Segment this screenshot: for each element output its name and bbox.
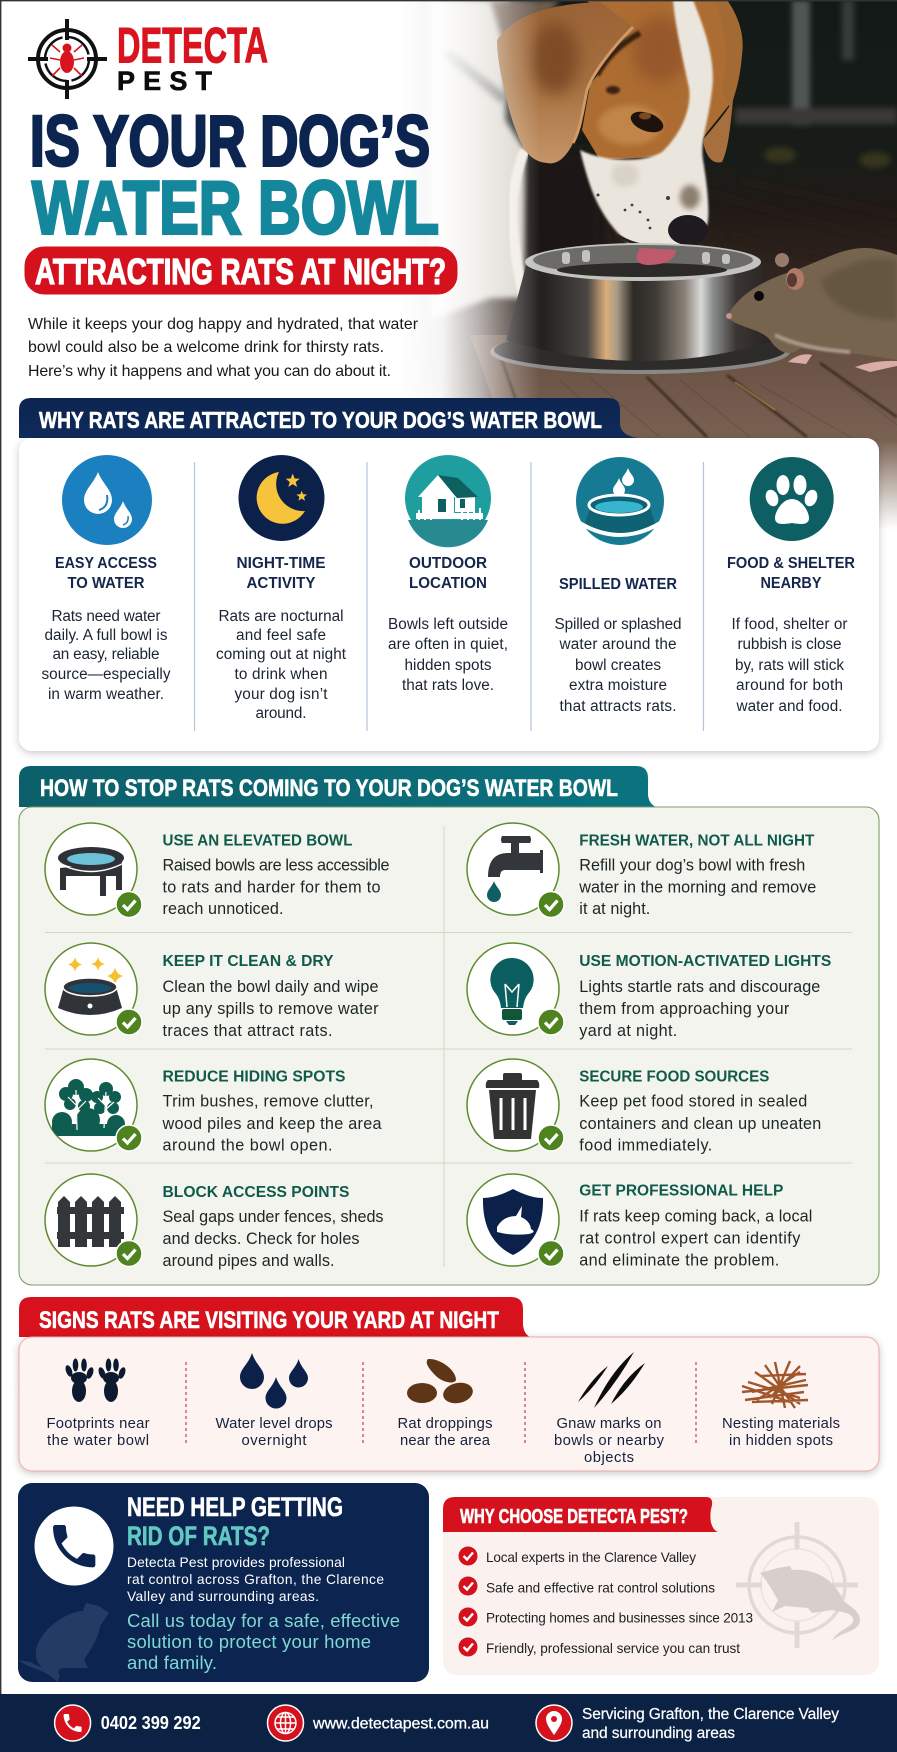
column: food and shelter: NEARBY bbox=[760, 575, 822, 592]
panel: why choose bbox=[443, 1497, 879, 1675]
logo mark: crosshair with bug bbox=[28, 19, 107, 99]
call to action body: Valley and surrounding areas. bbox=[127, 1589, 319, 1604]
tip: fresh water: it at night. bbox=[579, 900, 650, 918]
intro text bbox=[28, 316, 419, 380]
footer website: www.detectapest.com.au bbox=[312, 1716, 489, 1732]
call to action highlight: and family. bbox=[127, 1652, 217, 1673]
panel: how to stop rats bbox=[19, 807, 879, 1285]
tip: motion lights: them from approaching your bbox=[579, 1000, 790, 1018]
footer phone: 0402 399 292 bbox=[101, 1713, 201, 1733]
column: spilled water: extra moisture bbox=[569, 677, 667, 694]
section header: why rats are attracted bbox=[19, 398, 638, 445]
column: outdoor location: hidden spots bbox=[404, 657, 492, 674]
column: food and shelter: water and food. bbox=[736, 698, 842, 715]
column: easy access: daily. A full bowl is bbox=[44, 627, 168, 644]
tip: motion lights bbox=[467, 943, 831, 1040]
dog head bbox=[580, 0, 743, 251]
dog ear bbox=[497, 2, 633, 163]
column: outdoor location: are often in quiet, bbox=[388, 636, 508, 653]
tip: secure food: SECURE FOOD SOURCES bbox=[579, 1068, 769, 1086]
sign: footprints bbox=[46, 1358, 150, 1449]
logo: PEST bbox=[117, 66, 212, 96]
footer bar bbox=[0, 1694, 897, 1752]
tip: fresh water: Refill your dog’s bowl with fresh bbox=[579, 856, 805, 874]
column: food and shelter: around for both bbox=[736, 677, 843, 694]
column: easy access: EASY ACCESS bbox=[55, 555, 157, 572]
intro text: While it keeps your dog happy and hydrated, that water bbox=[28, 316, 419, 333]
sign: water level: overnight bbox=[242, 1433, 306, 1449]
title: IS YOUR DOG’S bbox=[30, 102, 430, 182]
footer location bbox=[536, 1705, 839, 1742]
tip: motion lights: USE MOTION-ACTIVATED LIGHTS bbox=[579, 953, 831, 970]
tip: keep clean bbox=[45, 943, 379, 1040]
tip: fresh water: FRESH WATER, NOT ALL NIGHT bbox=[579, 832, 815, 850]
column: food and shelter: rubbish is close bbox=[738, 636, 842, 653]
tip: elevated bowl: Raised bowls are less accessible bbox=[162, 856, 390, 874]
tip: keep clean: traces that attract rats. bbox=[162, 1022, 332, 1040]
why choose header bbox=[443, 1497, 718, 1532]
phone icon bbox=[34, 1506, 114, 1586]
tip: elevated bowl: USE AN ELEVATED BOWL bbox=[162, 832, 352, 850]
tip: motion lights: yard at night. bbox=[579, 1022, 677, 1040]
checklist: Local experts in the Clarence Valley bbox=[486, 1550, 696, 1565]
intro text: bowl could also be a welcome drink for thirsty rats. bbox=[28, 339, 384, 356]
tip: professional help: If rats keep coming back, a local bbox=[579, 1208, 812, 1226]
column: night-time activity: and feel safe bbox=[236, 627, 326, 644]
column: easy access: source—especially bbox=[42, 666, 171, 683]
icon: spilled bowl bbox=[576, 457, 664, 545]
column: food and shelter: If food, shelter or bbox=[732, 616, 848, 633]
tip: reduce hiding spots bbox=[45, 1059, 382, 1154]
sign: nesting materials: Nesting materials bbox=[722, 1416, 840, 1432]
sign: nesting materials: in hidden spots bbox=[729, 1433, 833, 1449]
sign: nesting materials bbox=[722, 1361, 840, 1449]
icon: moon and stars bbox=[238, 455, 324, 541]
call to action body bbox=[127, 1555, 384, 1604]
column: easy access: Rats need water bbox=[52, 608, 160, 625]
tip: block access points: around pipes and walls. bbox=[162, 1252, 334, 1270]
title bbox=[30, 102, 439, 250]
tip: reduce hiding spots: Trim bushes, remove clutter, bbox=[162, 1092, 374, 1110]
sign: droppings: Rat droppings bbox=[398, 1416, 492, 1432]
tip: secure food: food immediately. bbox=[579, 1136, 712, 1154]
section header: signs rats are visiting bbox=[19, 1297, 530, 1345]
sign: footprints: Footprints near bbox=[46, 1416, 150, 1432]
tip: secure food bbox=[467, 1059, 821, 1154]
sign: droppings bbox=[398, 1359, 492, 1449]
column: night-time activity: coming out at night bbox=[216, 646, 347, 663]
call to action heading: NEED HELP GETTING bbox=[127, 1492, 343, 1522]
call to action highlight: Call us today for a safe, effective bbox=[127, 1610, 400, 1631]
column: outdoor location: OUTDOOR bbox=[409, 555, 487, 572]
column: outdoor location bbox=[388, 555, 508, 694]
tip: fresh water: water in the morning and remove bbox=[578, 878, 816, 896]
tip: elevated bowl: reach unnoticed. bbox=[162, 900, 284, 918]
checklist bbox=[458, 1546, 753, 1656]
logo bbox=[28, 18, 268, 99]
column: night-time activity: your dog isn’t bbox=[234, 686, 328, 703]
column: night-time activity bbox=[216, 555, 347, 722]
rat watermark bbox=[736, 1522, 860, 1648]
column: outdoor location: LOCATION bbox=[409, 575, 487, 592]
tip: elevated bowl bbox=[45, 823, 390, 918]
column: spilled water bbox=[554, 576, 682, 715]
tip: secure food: Keep pet food stored in sealed bbox=[579, 1092, 807, 1110]
column: spilled water: bowl creates bbox=[575, 657, 661, 674]
dog body bbox=[430, 0, 560, 320]
column: night-time activity: around. bbox=[256, 705, 306, 722]
intro text: Here’s why it happens and what you can do about it. bbox=[28, 363, 391, 380]
section header: how to stop rats bbox=[19, 766, 656, 815]
sign: gnaw marks bbox=[554, 1352, 665, 1466]
column: easy access: an easy, reliable bbox=[52, 646, 160, 663]
tip: block access points: Seal gaps under fences, sheds bbox=[162, 1208, 384, 1226]
tip: secure food: containers and clean up uneaten bbox=[579, 1115, 821, 1133]
logo wordmark: DETECTA bbox=[117, 18, 268, 74]
icon: house bbox=[405, 455, 491, 547]
sign: water level: Water level drops bbox=[216, 1416, 332, 1432]
tip: professional help: GET PROFESSIONAL HELP bbox=[579, 1182, 783, 1200]
subtitle pill bbox=[24, 246, 458, 295]
call to action heading: RID OF RATS? bbox=[127, 1521, 270, 1551]
footer website bbox=[268, 1705, 489, 1741]
call to action heading bbox=[127, 1492, 343, 1551]
tip: reduce hiding spots: REDUCE HIDING SPOTS bbox=[162, 1068, 346, 1086]
sign: gnaw marks: Gnaw marks on bbox=[556, 1416, 662, 1432]
tip: motion lights: Lights startle rats and discourage bbox=[579, 978, 820, 996]
checklist: Safe and effective rat control solutions bbox=[486, 1580, 715, 1596]
sign: gnaw marks: objects bbox=[584, 1450, 634, 1466]
column: easy access: TO WATER bbox=[68, 575, 144, 592]
tip: keep clean: up any spills to remove water bbox=[162, 1000, 379, 1018]
tip: elevated bowl: to rats and harder for them to bbox=[162, 878, 380, 896]
tip: keep clean: KEEP IT CLEAN & DRY bbox=[162, 953, 334, 970]
title: WATER BOWL bbox=[32, 166, 439, 250]
section header: how to stop rats: HOW TO STOP RATS COMING TO YOUR DOG’S WATER BOWL bbox=[40, 775, 618, 802]
sign: water level bbox=[216, 1353, 332, 1449]
footer phone bbox=[55, 1705, 201, 1741]
column: outdoor location: Bowls left outside bbox=[388, 616, 508, 633]
call to action highlight bbox=[127, 1610, 400, 1673]
tip: professional help: rat control expert can identify bbox=[579, 1230, 801, 1248]
icon: water drops bbox=[62, 455, 152, 545]
sign: droppings: near the area bbox=[400, 1433, 491, 1449]
column: night-time activity: to drink when bbox=[234, 666, 328, 683]
tip: keep clean: Clean the bowl daily and wipe bbox=[162, 978, 378, 996]
tip: block access points: and decks. Check for holes bbox=[162, 1230, 360, 1248]
tip: block access points: BLOCK ACCESS POINTS bbox=[162, 1184, 350, 1201]
section header: signs rats are visiting: SIGNS RATS ARE VISITING YOUR YARD AT NIGHT bbox=[39, 1307, 499, 1334]
checklist: Protecting homes and businesses since 2013 bbox=[486, 1610, 753, 1626]
footer location: and surrounding areas bbox=[582, 1725, 735, 1742]
tip: reduce hiding spots: wood piles and keep the area bbox=[162, 1115, 382, 1133]
tip: professional help bbox=[467, 1174, 812, 1270]
tip: professional help: and eliminate the problem. bbox=[579, 1252, 779, 1270]
panel: signs bbox=[19, 1337, 879, 1471]
column: spilled water: that attracts rats. bbox=[560, 698, 676, 715]
column: night-time activity: Rats are nocturnal bbox=[218, 608, 344, 625]
column: night-time activity: ACTIVITY bbox=[246, 575, 316, 592]
why choose header: WHY CHOOSE DETECTA PEST? bbox=[460, 1506, 688, 1528]
hero photo: dog drinking from bowl with rat bbox=[400, 0, 897, 530]
column: easy access bbox=[42, 555, 171, 703]
panel: call to action bbox=[18, 1483, 429, 1682]
section header: why rats are attracted: WHY RATS ARE ATTRACTED TO YOUR DOG’S WATER BOWL bbox=[39, 407, 602, 433]
call to action body: Detecta Pest provides professional bbox=[127, 1555, 345, 1570]
column: night-time activity: NIGHT-TIME bbox=[236, 555, 326, 572]
call to action highlight: solution to protect your home bbox=[127, 1631, 371, 1652]
column: spilled water: water around the bbox=[558, 636, 676, 653]
column: spilled water: SPILLED WATER bbox=[559, 576, 677, 593]
footer location: Servicing Grafton, the Clarence Valley bbox=[582, 1706, 839, 1723]
tip: fresh water bbox=[467, 823, 816, 918]
tip: reduce hiding spots: around the bowl open. bbox=[162, 1136, 332, 1154]
sign: footprints: the water bowl bbox=[47, 1433, 149, 1449]
tip: block access points bbox=[45, 1174, 384, 1270]
rat silhouette bbox=[19, 1603, 109, 1682]
icon: paw bbox=[750, 457, 834, 541]
column: easy access: in warm weather. bbox=[48, 686, 164, 703]
call to action body: rat control across Grafton, the Clarence bbox=[127, 1572, 384, 1587]
metal bowl bbox=[490, 243, 790, 374]
column: food and shelter: FOOD & SHELTER bbox=[727, 555, 855, 572]
subtitle pill: ATTRACTING RATS AT NIGHT? bbox=[35, 251, 446, 292]
checklist: Friendly, professional service you can trust bbox=[486, 1641, 740, 1656]
panel: why rats are attracted bbox=[19, 438, 879, 751]
column: food and shelter bbox=[727, 555, 855, 715]
column: outdoor location: that rats love. bbox=[402, 677, 494, 694]
column: spilled water: Spilled or splashed bbox=[554, 616, 682, 633]
rat bbox=[726, 248, 897, 372]
column: food and shelter: by, rats will stick bbox=[735, 657, 844, 674]
sign: gnaw marks: bowls or nearby bbox=[554, 1433, 665, 1449]
